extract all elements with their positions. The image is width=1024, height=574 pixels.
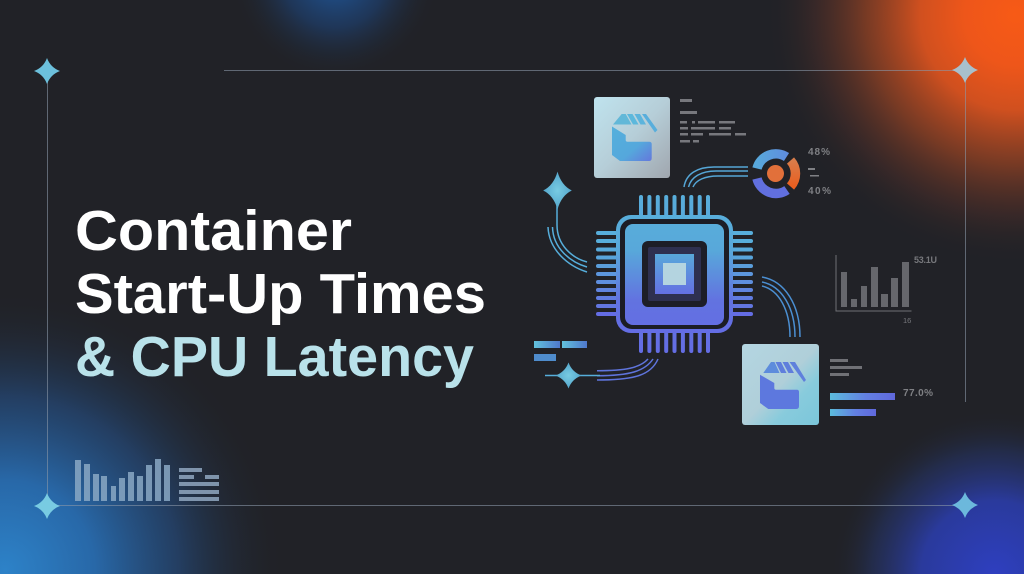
arrow: wires from chip to lower star xyxy=(597,359,658,380)
bar chart: right: 16 xyxy=(903,316,911,325)
icon: left star xyxy=(543,172,572,209)
progress bars xyxy=(830,393,895,416)
arrow: wires from chip to lower tile xyxy=(762,277,800,337)
bar chart: right: 53.1U xyxy=(914,255,937,265)
panel: top container tile xyxy=(594,97,670,178)
text block: donut labels xyxy=(808,147,831,197)
icon: container box xyxy=(760,362,806,409)
bar chart: bottom-left xyxy=(75,459,219,501)
text block: donut labels: 48% xyxy=(808,147,830,158)
title: Container xyxy=(75,199,352,263)
title: & CPU Latency xyxy=(75,325,474,389)
icon: container box xyxy=(612,114,658,161)
arrow: wires from chip to donut xyxy=(684,167,748,187)
text block: donut labels: 40% xyxy=(808,186,831,197)
title xyxy=(75,199,486,389)
panel: bottom container tile xyxy=(742,344,819,425)
text block: bottom tile notes: 77.0% xyxy=(903,388,933,399)
icon: small dash bars xyxy=(534,341,587,361)
arrow: wires from left star to chip xyxy=(548,190,587,272)
text block: top tile notes xyxy=(680,99,746,142)
bar chart: right xyxy=(836,255,937,325)
text block: legend lines xyxy=(179,468,219,501)
text block: bottom tile notes xyxy=(830,359,933,416)
icon: lower-left star xyxy=(545,362,600,388)
icon: CPU chip xyxy=(596,197,753,351)
icon: donut chart xyxy=(757,154,795,193)
title: Start-Up Times xyxy=(75,262,486,326)
chip pins xyxy=(641,197,708,351)
decorative frame with corner stars xyxy=(34,57,978,519)
